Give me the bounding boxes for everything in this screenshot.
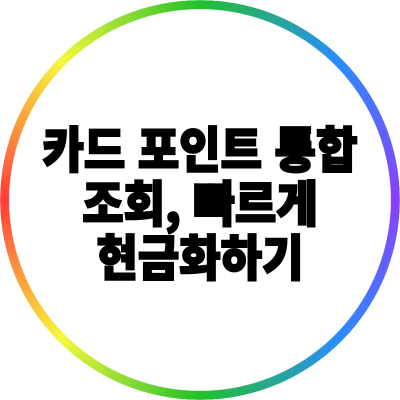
title: 카드 포인트 통합 bbox=[42, 111, 358, 182]
title: 현금화하기 bbox=[96, 219, 304, 290]
title: 조회, 빠르게 bbox=[82, 165, 318, 236]
title bbox=[42, 111, 358, 290]
